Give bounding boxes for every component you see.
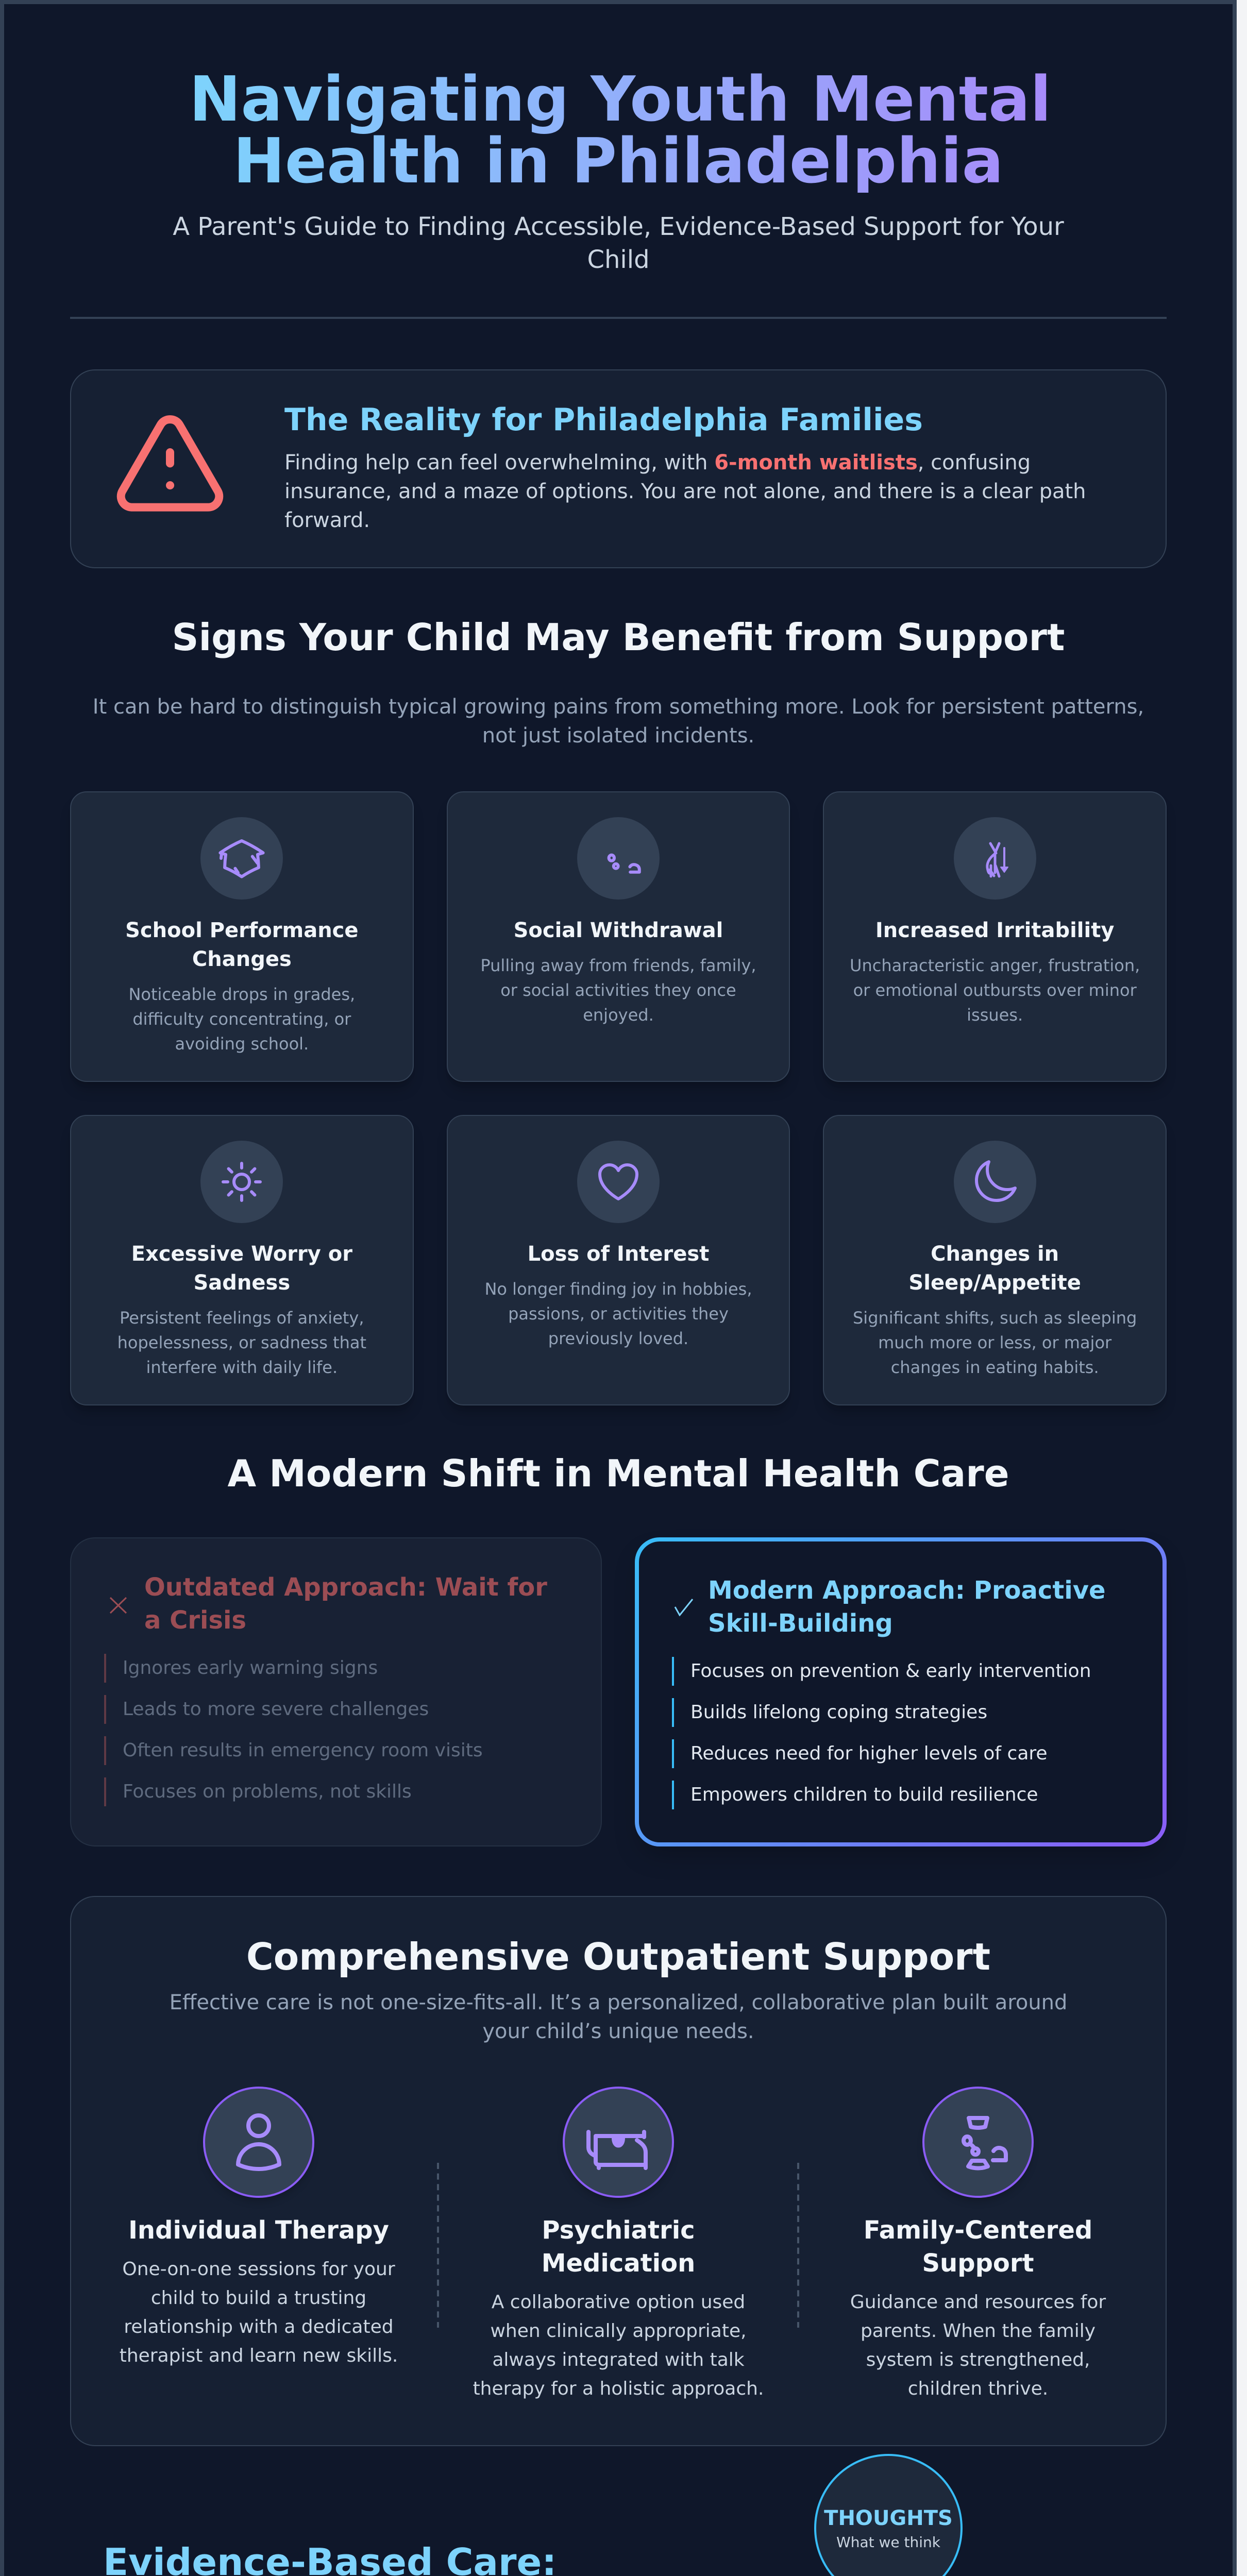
- item: [672, 1781, 1038, 1809]
- icon: check: [674, 1599, 694, 1616]
- item: [104, 1777, 412, 1806]
- card text: Noticeable drops in grades,: [128, 985, 355, 1004]
- modern heading: Skill-Building: [708, 1609, 893, 1638]
- node: thoughts: What we think: [836, 2534, 941, 2551]
- card: sleep and appetite: [823, 1115, 1167, 1405]
- heading: comprehensive support: Comprehensive Outpatient Support: [246, 1935, 990, 1978]
- comprehensive intro text: your child’s unique needs.: [482, 2020, 754, 2043]
- item: [672, 1698, 987, 1727]
- card title: [131, 1242, 352, 1295]
- card text: avoiding school.: [175, 1034, 309, 1054]
- column: psychiatric medication: [473, 2216, 764, 2399]
- card title: Social Withdrawal: [514, 919, 723, 942]
- column title: Medication: [542, 2249, 695, 2278]
- card text: interfere with daily life.: [146, 1358, 338, 1377]
- column: family-centered support: [813, 2214, 1143, 2403]
- card text: Uncharacteristic anger, frustration,: [850, 956, 1140, 975]
- card text: [128, 985, 355, 1054]
- column title: Psychiatric: [542, 2216, 695, 2245]
- heading: signs: Signs Your Child May Benefit from Support: [172, 616, 1065, 659]
- column text: [813, 2288, 1143, 2403]
- column text: One-on-one sessions for your: [122, 2259, 395, 2280]
- reality text: forward.: [284, 509, 370, 532]
- divider: column separator: [797, 2163, 799, 2328]
- card title: [125, 919, 359, 971]
- column text: children thrive.: [908, 2378, 1048, 2399]
- card: increased irritability: [823, 791, 1167, 1082]
- icon: family-centered: [922, 2087, 1034, 2198]
- card title: Loss of Interest: [528, 1242, 709, 1266]
- item: Focuses on prevention & early intervention: [690, 1660, 1091, 1682]
- column title: [453, 2214, 783, 2280]
- icon: academic cap: [200, 817, 283, 900]
- column: individual therapy: [120, 2216, 398, 2366]
- card text: [853, 1308, 1137, 1377]
- card text: hopelessness, or sadness that: [117, 1333, 366, 1352]
- card text: much more or less, or major: [878, 1333, 1111, 1352]
- icon: cross: [110, 1597, 127, 1614]
- modern heading: [708, 1576, 1106, 1638]
- card text: issues.: [967, 1005, 1023, 1025]
- card title: Sadness: [194, 1271, 290, 1295]
- column text: always integrated with talk: [492, 2349, 745, 2370]
- item: Empowers children to build resilience: [690, 1784, 1038, 1805]
- panel: comprehensive outpatient support: [70, 1896, 1167, 2446]
- card title: [908, 1242, 1081, 1295]
- subtitle: Child: [587, 245, 650, 274]
- card text: changes in eating habits.: [891, 1358, 1099, 1377]
- divider: column separator: [437, 2163, 439, 2328]
- triangle: [679, 2571, 1098, 2576]
- column text: when clinically appropriate,: [490, 2320, 747, 2342]
- column text: A collaborative option used: [492, 2292, 745, 2313]
- card title: Excessive Worry or: [131, 1242, 352, 1266]
- card text: Significant shifts, such as sleeping: [853, 1308, 1137, 1328]
- subtitle: [173, 212, 1064, 274]
- icon: sun: [200, 1141, 283, 1223]
- panel: outdated approach: [70, 1537, 602, 1846]
- node: thoughts: THOUGHTS: [824, 2506, 953, 2530]
- reality text: Finding help can feel overwhelming, with 6-month waitlists, confusing: [284, 451, 1031, 474]
- panel: modern approach: [635, 1537, 1167, 1846]
- item: [104, 1654, 378, 1683]
- icon: scribbled bolt and arrow: [954, 817, 1036, 900]
- outdated heading: [144, 1573, 547, 1635]
- column title: [813, 2214, 1143, 2280]
- column title: Individual Therapy: [128, 2216, 389, 2245]
- item: Reduces need for higher levels of care: [690, 1743, 1048, 1764]
- item: Builds lifelong coping strategies: [690, 1702, 987, 1723]
- panel: the reality for Philadelphia families: [70, 369, 1167, 568]
- item: [672, 1657, 1091, 1686]
- subtitle: A Parent's Guide to Finding Accessible, Evidence-Based Support for Your: [173, 212, 1064, 241]
- item: Ignores early warning signs: [123, 1657, 378, 1679]
- reality heading: The Reality for Philadelphia Families: [284, 402, 923, 438]
- column text: parents. When the family: [861, 2320, 1096, 2342]
- card text: enjoyed.: [583, 1005, 654, 1025]
- column title: Family-Centered: [864, 2216, 1092, 2245]
- card text: Persistent feelings of anxiety,: [120, 1308, 364, 1328]
- icon: individual therapy person: [203, 2087, 314, 2198]
- heading: modern shift: A Modern Shift in Mental Health Care: [227, 1452, 1009, 1495]
- reality text: insurance, and a maze of options. You are not alone, and there is a clear path: [284, 480, 1086, 503]
- column text: [120, 2259, 398, 2366]
- card text: No longer finding joy in hobbies,: [484, 1279, 752, 1299]
- item: [104, 1695, 429, 1724]
- card text: [117, 1308, 366, 1377]
- card title: Increased Irritability: [875, 919, 1114, 942]
- item: Often results in emergency room visits: [123, 1740, 483, 1761]
- comprehensive intro text: Effective care is not one-size-fits-all. It’s a personalized, collaborative plan built around: [170, 1991, 1067, 2014]
- card title: Changes: [192, 947, 292, 971]
- card text: or social activities they once: [500, 980, 736, 1000]
- card: excessive worry: [70, 1115, 414, 1405]
- card text: previously loved.: [548, 1329, 688, 1348]
- card text: or emotional outbursts over minor: [853, 980, 1137, 1000]
- item: [672, 1739, 1048, 1768]
- icon: warning triangle: [116, 415, 224, 512]
- column text: Guidance and resources for: [850, 2292, 1106, 2313]
- item: Focuses on problems, not skills: [123, 1781, 412, 1802]
- icon: moon: [954, 1141, 1036, 1223]
- column text: relationship with a dedicated: [124, 2316, 394, 2337]
- outdated heading: a Crisis: [144, 1606, 246, 1635]
- card text: [480, 956, 756, 1025]
- icon: heart: [577, 1141, 660, 1223]
- card: social withdrawal: [447, 791, 790, 1082]
- reality text: [284, 451, 1086, 532]
- outdated heading: Outdated Approach: Wait for: [144, 1573, 547, 1602]
- card title: Changes in: [931, 1242, 1059, 1266]
- column text: [453, 2288, 783, 2403]
- card text: Pulling away from friends, family,: [480, 956, 756, 975]
- diagram: CBT triangle: [613, 2447, 1165, 2576]
- column title: Support: [922, 2249, 1034, 2278]
- icon: psychiatric medication: [563, 2087, 674, 2198]
- title: Health in Philadelphia: [233, 126, 1004, 197]
- card text: passions, or activities they: [508, 1304, 729, 1324]
- column text: system is strengthened,: [866, 2349, 1090, 2370]
- title: [189, 69, 1048, 193]
- card text: [850, 956, 1140, 1025]
- title: Navigating Youth Mental: [189, 64, 1051, 135]
- item: [104, 1736, 483, 1765]
- card title: Sleep/Appetite: [908, 1271, 1081, 1295]
- column text: therapy for a holistic approach.: [473, 2378, 764, 2399]
- modern heading: Modern Approach: Proactive: [708, 1576, 1106, 1605]
- node: thoughts: [815, 2455, 962, 2576]
- column text: therapist and learn new skills.: [120, 2345, 398, 2366]
- signs intro text: not just isolated incidents.: [482, 724, 754, 748]
- card title: School Performance: [125, 919, 359, 942]
- column text: child to build a trusting: [151, 2287, 366, 2309]
- card text: [484, 1279, 752, 1348]
- signs intro text: [93, 695, 1144, 748]
- card: school performance: [70, 791, 414, 1082]
- comprehensive intro text: [170, 1991, 1067, 2043]
- card: loss of interest: [447, 1115, 790, 1405]
- card text: difficulty concentrating, or: [132, 1009, 351, 1029]
- item: Leads to more severe challenges: [123, 1699, 429, 1720]
- signs intro text: It can be hard to distinguish typical growing pains from something more. Look for persistent patterns,: [93, 695, 1144, 719]
- icon: people fragment: [577, 817, 660, 900]
